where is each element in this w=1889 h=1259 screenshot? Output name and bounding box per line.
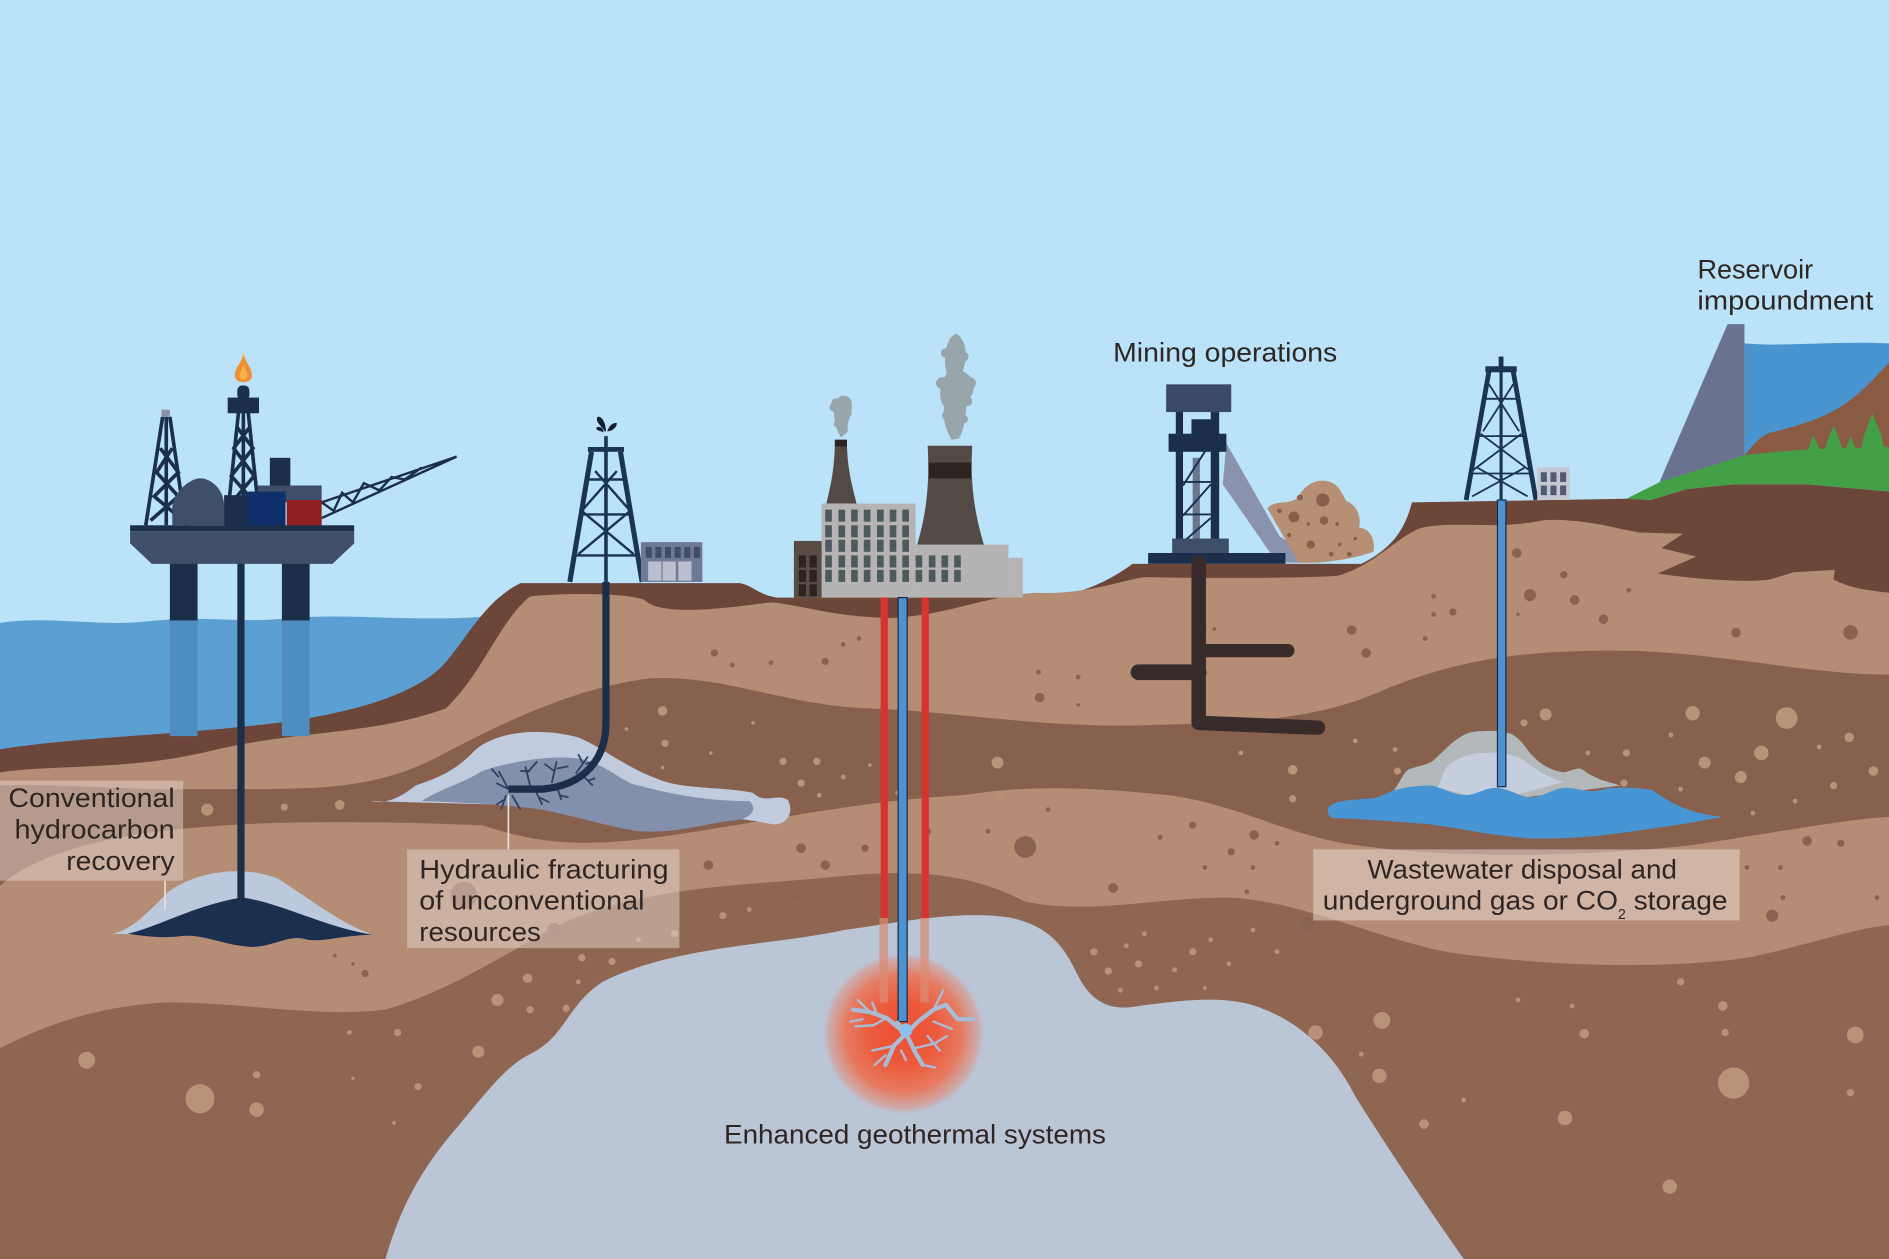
deep brown layer: [0, 873, 1889, 1259]
chimney block: [270, 458, 290, 488]
far right annex: [1008, 558, 1023, 598]
soil specks, dark: [333, 548, 1879, 977]
label: reservoir impoundment: [1697, 253, 1874, 316]
derrick frame: [570, 436, 642, 582]
headframe bracing: [1183, 448, 1211, 542]
reservoir water: [1744, 343, 1889, 458]
trees: [1805, 413, 1887, 464]
oil spurt: [596, 417, 617, 433]
magma body: [386, 915, 1464, 1259]
label: reservoir impoundment: Reservoir: [1697, 253, 1813, 284]
geothermal heat glow: [822, 952, 985, 1116]
label: conventional hydrocarbon recovery: [0, 781, 183, 881]
deck top: [130, 525, 354, 531]
offshore drilling platform: [130, 353, 457, 900]
well: conventional hydrocarbon reservoir: [112, 871, 373, 947]
sea water: [0, 617, 482, 771]
label: hydraulic fracturing: Hydraulic fracturing: [419, 853, 669, 884]
ground: base deep rock layer: [0, 484, 1889, 1259]
tan upper layer: [0, 520, 1889, 892]
geothermal fractures: [851, 990, 973, 1067]
leader lines: [165, 795, 508, 910]
base plate: [1148, 553, 1285, 564]
flare: [235, 353, 252, 382]
left derrick: [146, 410, 186, 525]
mining operation: [1138, 384, 1374, 728]
blue module: [248, 492, 286, 526]
headframe machinery: [1169, 419, 1226, 452]
label: conventional hydrocarbon recovery: Conventional: [8, 782, 175, 813]
small stack: [826, 440, 857, 504]
label: hydraulic fracturing: [407, 849, 679, 948]
spoil heap: [1267, 481, 1374, 563]
label: wastewater disposal and storage: 2: [1618, 907, 1626, 923]
label: enhanced geothermal systems: Enhanced geothermal systems: [724, 1118, 1106, 1149]
big tower smoke: [936, 334, 976, 440]
cooling tower band: [929, 463, 971, 478]
mid brown layer: [0, 651, 1889, 916]
disposal reservoir: [1328, 731, 1723, 839]
label: wastewater disposal and storage: storage: [1634, 885, 1728, 916]
label: hydraulic fracturing: resources: [419, 916, 541, 947]
fracking reservoir: [371, 732, 790, 832]
dome tank: [172, 478, 224, 525]
label: wastewater disposal and storage: underground gas or CO: [1323, 885, 1618, 916]
mine shaft and tunnels: [1138, 563, 1318, 728]
label: mining operations: Mining operations: [1113, 336, 1337, 367]
crane boom: [322, 457, 457, 518]
headframe top box: [1166, 384, 1231, 412]
cooling tower: [917, 446, 984, 546]
small stack smoke: [829, 396, 852, 437]
grey module: [258, 486, 322, 502]
conveyor chute: [1223, 443, 1319, 563]
dark module: [224, 495, 251, 526]
lower right wing: [916, 545, 1008, 598]
platform legs: [170, 563, 310, 736]
deck: [130, 531, 354, 564]
well pipe: [508, 582, 606, 789]
flare derrick: [226, 386, 260, 525]
red injection pipes: [879, 598, 929, 1002]
hydraulic fracture network: [492, 754, 595, 810]
main building: [822, 504, 916, 598]
blue well casing: [1497, 500, 1506, 787]
blue production pipe: [898, 598, 907, 1022]
headframe legs: [1176, 412, 1219, 542]
disposal well derrick: [1466, 357, 1570, 787]
derrick frame: [1466, 357, 1536, 500]
headframe base: [1172, 539, 1229, 553]
power plant: [794, 334, 1023, 598]
label: wastewater disposal and storage: Wastewater disposal and: [1367, 853, 1677, 884]
hillside behind reservoir: [1744, 363, 1889, 482]
red module: [287, 500, 322, 526]
soil specks, light: [78, 706, 1878, 1194]
well building: [641, 542, 702, 582]
label: conventional hydrocarbon recovery: hydrocarbon: [14, 814, 175, 845]
left dark building: [794, 541, 823, 598]
small stack band: [835, 440, 847, 446]
label: hydraulic fracturing: of unconventional: [419, 885, 645, 916]
label: conventional hydrocarbon recovery: recovery: [66, 845, 175, 876]
small building: [1537, 467, 1570, 500]
dam: [1660, 324, 1744, 488]
geothermal wells: [879, 598, 929, 1022]
tan lower layer: [0, 788, 1889, 1084]
grass: [1626, 447, 1889, 500]
label: wastewater disposal and storage: [1313, 849, 1740, 923]
drill pipe: [237, 563, 245, 900]
headframe hoist rope: [1193, 458, 1200, 542]
main building windows: [825, 510, 961, 582]
fracking well derrick: [508, 417, 702, 789]
label: reservoir impoundment: impoundment: [1697, 285, 1874, 316]
